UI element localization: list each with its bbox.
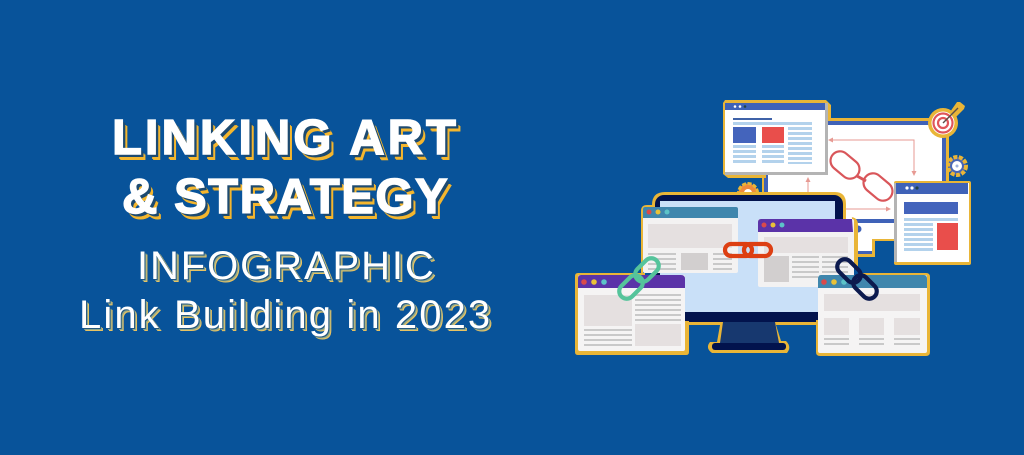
- monitor: [652, 192, 846, 353]
- title: and strategy: & STRATEGY: [122, 170, 449, 224]
- window: monitor left page: [641, 205, 738, 280]
- icon: gear right: [948, 157, 966, 175]
- window: right article: [894, 181, 971, 265]
- icon: gear left: [738, 184, 758, 202]
- large back panel: [762, 118, 949, 270]
- window: bottom left page: [575, 273, 689, 355]
- subtitle: link building in 2023: Link Building in 2023: [79, 293, 492, 337]
- icon: navy chain link: [834, 256, 880, 302]
- window: monitor right page: [758, 217, 858, 287]
- icon: red chain link: [827, 147, 896, 205]
- window: bottom right page: [816, 273, 930, 356]
- window: top left analytics: [723, 100, 831, 178]
- icon: target: [928, 102, 965, 138]
- icon: green chain link: [616, 255, 662, 302]
- title: linking art: LINKING ART: [112, 111, 459, 165]
- icon: orange chain link: [725, 244, 771, 256]
- subtitle: infographic: INFOGRAPHIC: [137, 244, 436, 288]
